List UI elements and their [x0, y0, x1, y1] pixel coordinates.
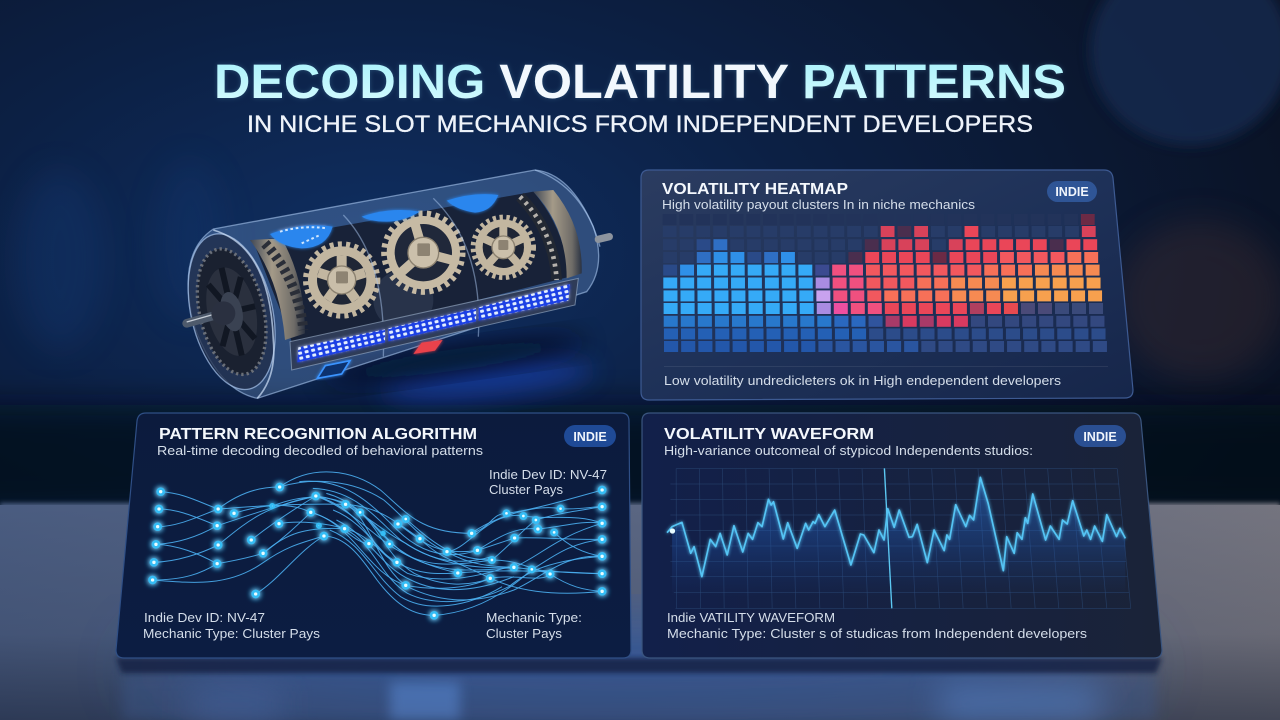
annotation: bottom left dev id: Mechanic Type: Cluster Pays	[143, 626, 321, 641]
waveform chart	[667, 468, 1131, 608]
heading: volatility heatmap: VOLATILITY HEATMAP	[662, 181, 848, 198]
badge: indie: INDIE	[573, 430, 607, 444]
panel: volatility waveform	[642, 413, 1162, 658]
annotation: top right dev id: Indie Dev ID: NV-47	[489, 467, 607, 482]
heading: pattern recognition: PATTERN RECOGNITION ALGORITHM	[159, 426, 477, 443]
subheading: pattern recognition: Real-time decoding decodled of behavioral patterns	[157, 443, 484, 458]
title: DECODING VOLATILITY PATTERNS	[214, 56, 1066, 109]
network diagram	[150, 472, 605, 618]
annotation: bottom right mechanic type: Mechanic Type:	[486, 610, 582, 625]
right axle	[598, 237, 609, 239]
waveform footer caption	[667, 610, 1088, 641]
waveform footer caption: Indie VATILITY WAVEFORM	[667, 610, 835, 625]
panel contact shadow	[116, 658, 1162, 673]
left end cap	[174, 225, 289, 398]
badge: indie	[564, 425, 616, 447]
panel: pattern recognition algorithm	[116, 413, 631, 658]
panel: volatility heatmap	[641, 170, 1133, 400]
gear 3	[473, 217, 533, 277]
subheading: waveform: High-variance outcomeal of stypicod Independents studios:	[664, 443, 1033, 458]
heading: volatility waveform: VOLATILITY WAVEFORM	[664, 426, 874, 443]
annotation: top right dev id	[489, 467, 607, 497]
badge: indie	[1074, 425, 1126, 447]
annotation: bottom left dev id: Indie Dev ID: NV-47	[144, 610, 265, 625]
annotation: top right dev id: Cluster Pays	[489, 482, 563, 497]
badge: indie: INDIE	[1055, 185, 1089, 199]
gear 2	[384, 214, 462, 292]
glass reflections and reel lines	[343, 198, 479, 357]
annotation: bottom right mechanic type: Cluster Pays	[486, 626, 563, 641]
gear 1	[306, 244, 433, 330]
heatmap footer caption: Low volatility undredicleters ok in High endependent developers	[664, 373, 1062, 388]
left axle	[187, 314, 220, 323]
LED strip	[290, 278, 578, 370]
annotation: bottom left dev id	[143, 610, 321, 641]
subtitle: IN NICHE SLOT MECHANICS FROM INDEPENDENT DEVELOPERS	[247, 111, 1033, 138]
blue indicator	[317, 361, 350, 378]
subheading: heatmap: High volatility payout clusters In in niche mechanics	[662, 197, 976, 212]
badge: indie: INDIE	[1083, 430, 1117, 444]
reflection of panels on table	[122, 674, 1156, 720]
waveform footer caption: Mechanic Type: Cluster s of studicas from Independent developers	[667, 626, 1088, 641]
illustration: glass reel cylinder with gears	[174, 170, 609, 408]
annotation: bottom right mechanic type	[486, 610, 582, 641]
blue glow chips on top	[270, 194, 498, 248]
red indicator	[413, 340, 443, 354]
heatmap grid	[663, 214, 1107, 352]
badge: indie	[1047, 181, 1097, 202]
